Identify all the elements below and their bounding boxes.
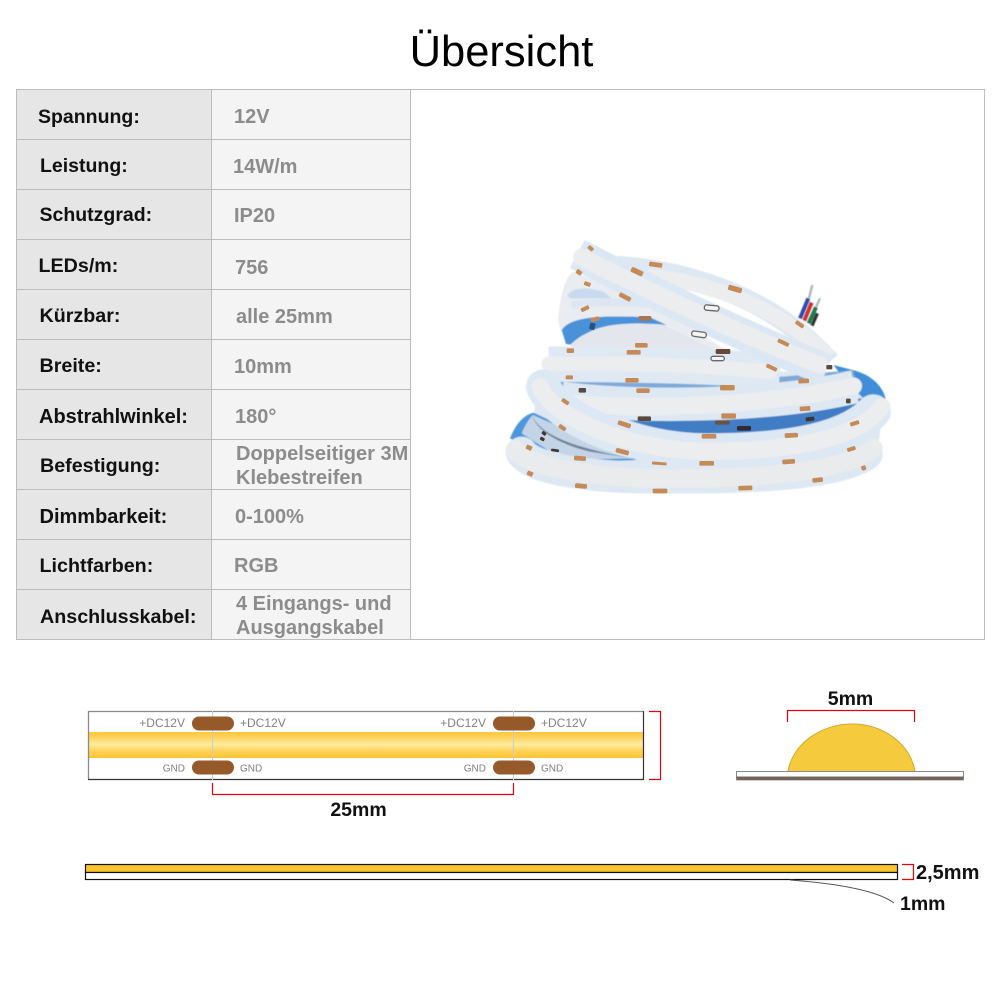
top-view strip diagram xyxy=(88,711,660,821)
25mm dimension xyxy=(212,783,514,821)
row: Dimmbarkeit xyxy=(40,506,304,528)
5mm dimension xyxy=(788,688,914,722)
cross-section diagram xyxy=(736,688,964,780)
row: Befestigung: Befestigung: xyxy=(40,455,160,477)
row: Kürzbar xyxy=(40,305,333,328)
copper pads xyxy=(192,716,535,774)
specification table and photo panel xyxy=(16,90,984,640)
dark pads seen through tape xyxy=(539,322,851,452)
row: LEDs/m: 756 xyxy=(235,257,268,279)
row: Anschlusskabel: Anschlusskabel: xyxy=(40,606,196,628)
row: Befestigung: Klebestreifen xyxy=(236,467,363,489)
row: Abstrahlwinkel: Abstrahlwinkel: xyxy=(39,406,188,428)
base layers xyxy=(736,772,964,780)
side-view strip diagram xyxy=(86,862,979,915)
lower pile silhouette xyxy=(513,372,883,490)
row: Anschlusskabel: Ausgangskabel xyxy=(236,617,384,639)
dome xyxy=(788,724,915,772)
row: Lichtfarben: Lichtfarben: xyxy=(40,555,153,577)
title: Übersicht xyxy=(410,28,593,76)
row: Lichtfarben xyxy=(40,555,278,577)
polarity labels: +DC12V xyxy=(541,716,587,730)
strip outline and light band xyxy=(88,711,644,780)
1mm leader xyxy=(790,880,946,915)
row: Lichtfarben: RGB xyxy=(234,555,278,577)
strip layers xyxy=(86,864,898,880)
row: Spannung: Spannung: xyxy=(38,106,140,128)
1mm leader: 1mm xyxy=(900,893,946,915)
polarity labels: GND xyxy=(163,764,185,774)
back blue tape xyxy=(833,365,886,410)
25mm dimension: 25mm xyxy=(330,799,387,821)
row: LEDs/m: LEDs/m: xyxy=(38,255,118,277)
second strip xyxy=(562,387,855,404)
row: Kürzbar: Kürzbar: xyxy=(40,305,120,327)
polarity labels: +DC12V xyxy=(240,716,286,730)
row: Abstrahlwinkel xyxy=(39,406,276,428)
polarity labels: GND xyxy=(541,764,563,774)
row: LEDs/m xyxy=(38,255,268,279)
2,5mm dimension: 2,5mm xyxy=(916,862,979,884)
polarity labels xyxy=(139,716,587,774)
row: Breite: Breite: xyxy=(40,355,102,377)
row: Anschlusskabel: 4 Eingangs- und xyxy=(236,593,392,615)
row: Leistung xyxy=(40,155,297,178)
middle strip xyxy=(548,364,780,372)
height bracket xyxy=(649,712,660,780)
back arc of top strip xyxy=(617,266,830,362)
polarity labels: +DC12V xyxy=(139,716,185,730)
row: Spannung xyxy=(38,106,270,128)
copper pads xyxy=(525,245,867,493)
upper coil mass xyxy=(558,272,763,373)
large coil xyxy=(543,387,873,451)
cut-point pads xyxy=(691,305,724,361)
row: Leistung: 14W/m xyxy=(233,156,297,178)
product photo: coiled LED strip xyxy=(510,245,886,493)
row: Befestigung xyxy=(40,443,408,489)
polarity labels: GND xyxy=(464,764,486,774)
5mm dimension: 5mm xyxy=(828,688,873,710)
wires xyxy=(800,285,820,326)
row: Breite xyxy=(40,355,292,378)
polarity labels: +DC12V xyxy=(440,716,486,730)
row: Schutzgrad xyxy=(40,204,275,227)
row: Schutzgrad: IP20 xyxy=(234,205,275,227)
row: Dimmbarkeit: Dimmbarkeit: xyxy=(40,506,167,528)
row: Schutzgrad: Schutzgrad: xyxy=(40,204,152,226)
row: Anschlusskabel xyxy=(40,593,392,639)
bottom coil xyxy=(522,453,867,477)
row: Breite: 10mm xyxy=(234,356,292,378)
row: Kürzbar: alle 25mm xyxy=(236,306,333,328)
polarity labels: GND xyxy=(240,764,262,774)
row: Befestigung: Doppelseitiger 3M xyxy=(236,443,408,465)
row: Spannung: 12V xyxy=(234,106,270,128)
row: Abstrahlwinkel: 180° xyxy=(235,406,276,428)
row: Dimmbarkeit: 0-100% xyxy=(235,506,304,528)
row: Leistung: Leistung: xyxy=(40,155,128,177)
front tilted strip xyxy=(577,254,827,370)
